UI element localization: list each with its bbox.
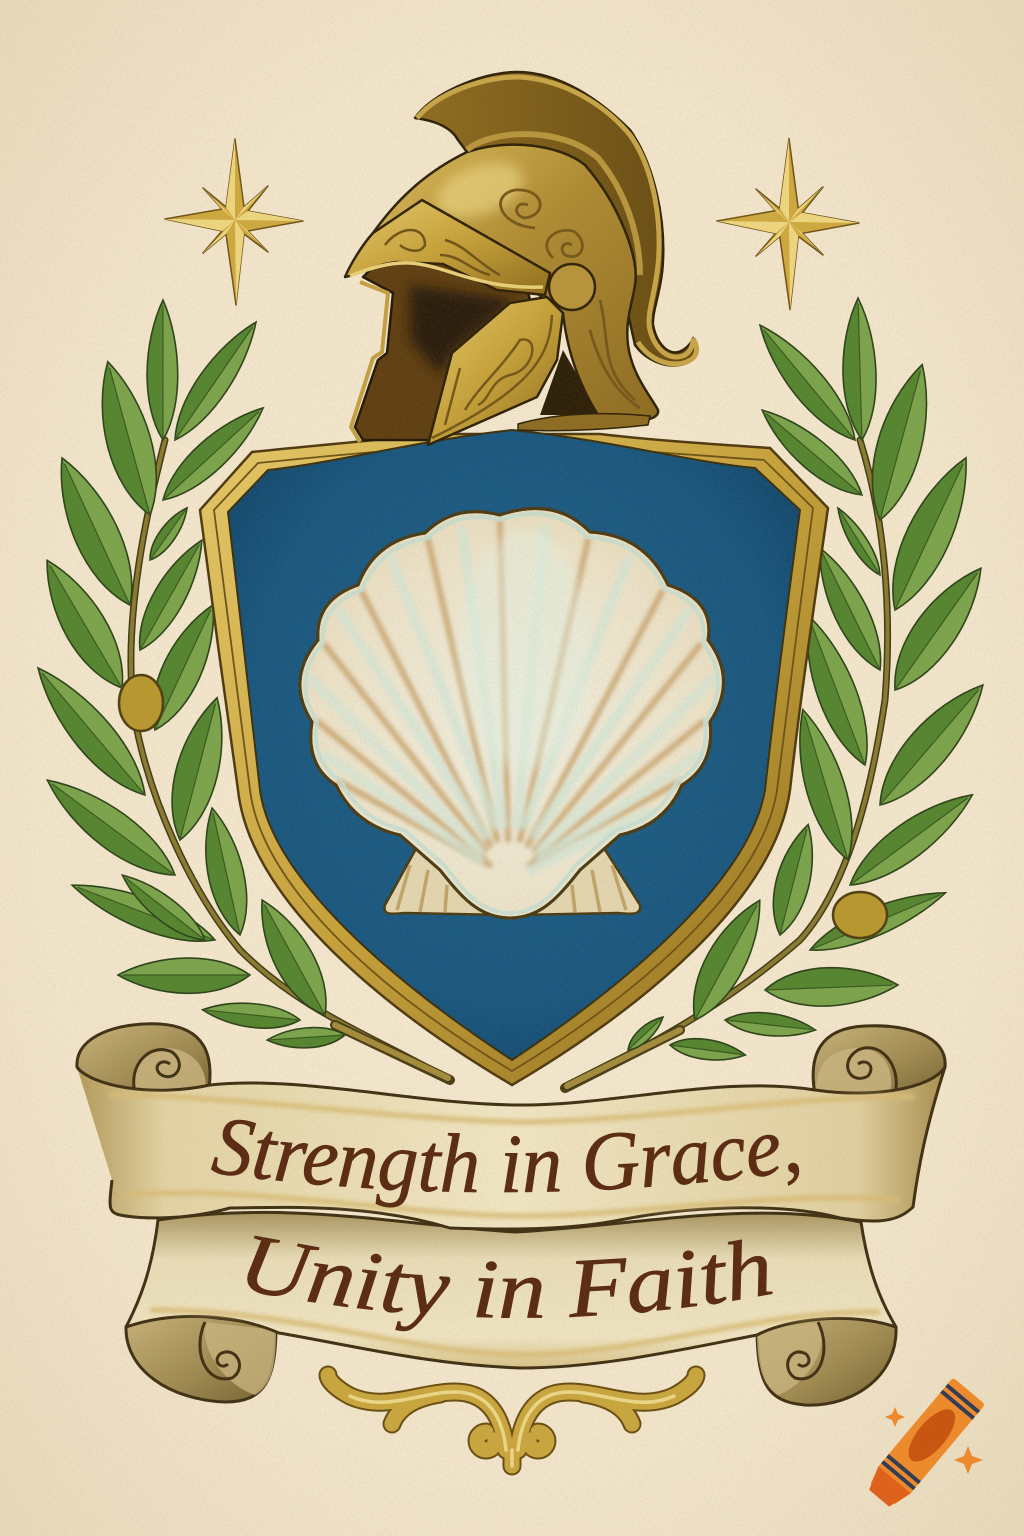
flourish dark outline xyxy=(328,1375,696,1466)
crest band xyxy=(467,134,640,275)
crayon logo xyxy=(863,1377,985,1512)
visor engraving xyxy=(385,230,500,275)
crest gold rim xyxy=(417,77,697,364)
lower ribbon streak xyxy=(150,1310,880,1355)
shell left ear xyxy=(384,845,505,915)
crayon xyxy=(863,1377,985,1512)
lower right roll xyxy=(757,1310,896,1405)
shield xyxy=(200,430,828,1085)
cheek guard engraving xyxy=(432,315,552,438)
lower ribbon band xyxy=(126,1212,896,1368)
sparkle large xyxy=(954,1446,983,1474)
lower left roll xyxy=(126,1310,276,1402)
helmet crest xyxy=(415,72,697,366)
scallop shell xyxy=(300,508,724,918)
laurel branch: right xyxy=(565,298,998,1088)
upper right roll xyxy=(813,1026,945,1100)
gold flourish ornament xyxy=(328,1375,696,1466)
shell pale inner edge xyxy=(305,514,718,913)
flourish gold body xyxy=(328,1375,696,1466)
upper left roll xyxy=(77,1024,210,1100)
star: right xyxy=(717,139,859,310)
laurel branch: left xyxy=(23,300,450,1080)
rosette xyxy=(549,264,595,310)
left olive xyxy=(119,675,163,731)
star: left xyxy=(165,139,303,305)
upper motto line: Strength in Grace, xyxy=(211,1120,800,1208)
ribbon scroll xyxy=(75,1022,947,1407)
dome highlight xyxy=(430,152,530,228)
shield blue field xyxy=(228,430,800,1060)
neck base band xyxy=(518,414,650,431)
interior left gold rim xyxy=(351,282,388,442)
upper ribbon streaks xyxy=(110,1095,915,1216)
shell pale green sheen xyxy=(312,528,712,870)
sparkle small xyxy=(885,1407,905,1427)
shell tan ribs xyxy=(318,522,703,865)
upper ribbon band xyxy=(77,1067,945,1229)
visor rim highlight xyxy=(350,263,543,287)
shell right ear xyxy=(515,845,640,915)
right olive xyxy=(833,892,887,938)
flourish highlight xyxy=(350,1392,674,1466)
neck shadow xyxy=(540,350,600,415)
shield gold border xyxy=(200,434,828,1085)
dome scroll engraving xyxy=(501,190,640,408)
shell body xyxy=(300,508,724,918)
lower motto line: Unity in Faith xyxy=(247,1236,773,1332)
right stem xyxy=(565,440,888,1088)
left leaves xyxy=(23,300,346,1050)
helmet dome xyxy=(373,145,658,421)
left stem xyxy=(131,440,450,1080)
right leaves xyxy=(623,298,998,1065)
visor band xyxy=(345,200,550,295)
helmet xyxy=(345,72,697,445)
shield gold inner line xyxy=(214,444,813,1071)
interior shadow xyxy=(410,285,515,375)
shell outline xyxy=(300,508,724,918)
ear ribs xyxy=(397,865,626,912)
cheek guard xyxy=(428,297,563,445)
helmet interior xyxy=(355,240,530,440)
shell central glow xyxy=(460,530,590,770)
